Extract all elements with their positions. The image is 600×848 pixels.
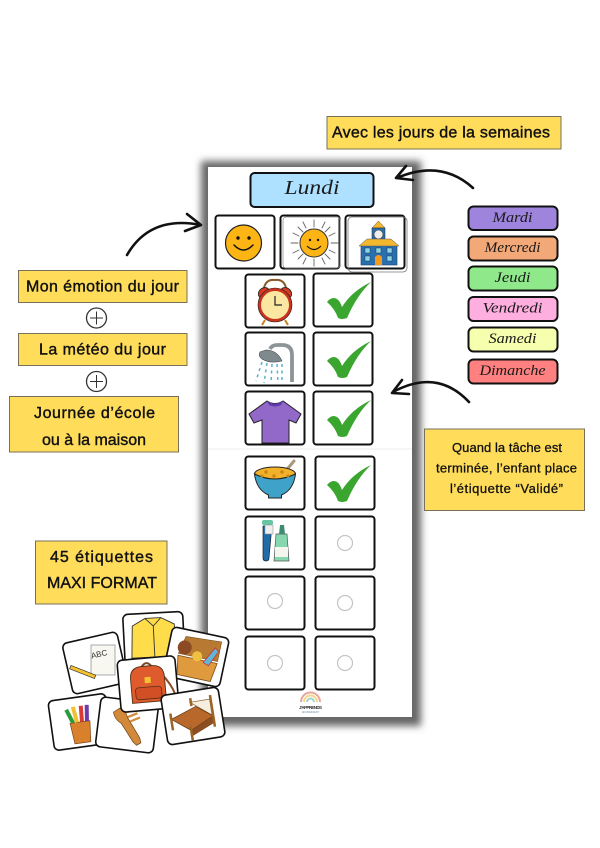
card: alarm clock [246, 274, 304, 328]
label card: writing ABC: ABC [90, 648, 108, 661]
callout: 45 maxi format labels [36, 541, 167, 604]
heading: Lundi: Lundi [283, 177, 340, 199]
day tag: Dimanche [468, 360, 558, 384]
callout: emotion of the day: Mon émotion du jour [26, 278, 180, 296]
day tag: Vendredi [468, 297, 558, 321]
callout: weather of the day: La météo du jour [39, 342, 167, 358]
validated check: wake up [314, 274, 372, 326]
empty slot [316, 576, 374, 630]
arrow: to validated checks [392, 380, 469, 402]
callout: weather of the day [18, 334, 187, 366]
empty slot [246, 636, 304, 690]
day tag: Samedi: Samedi [488, 331, 536, 347]
arrow: to day header [396, 166, 473, 188]
card: sunny weather [280, 216, 340, 268]
day tag: Mardi: Mardi [491, 210, 532, 226]
day tag: Mardi [468, 206, 558, 230]
panel: daily routine board [201, 161, 421, 726]
day tag: Dimanche: Dimanche [478, 363, 546, 379]
callout: school or home day: ou à la maison [42, 432, 146, 449]
card: cereal bowl [246, 456, 304, 510]
callout: school or home day [10, 396, 178, 452]
callout: with the days of the week [327, 116, 561, 149]
heading: Lundi [250, 173, 374, 207]
callout: with the days of the week: Avec les jours de la semaines [332, 124, 550, 142]
label card: yellow pyjama [123, 611, 185, 669]
callout: emotion of the day [18, 270, 187, 302]
card: school day [346, 216, 407, 272]
empty slot [316, 516, 374, 570]
callout: validated label explanation [424, 429, 584, 510]
card: shower [246, 332, 304, 386]
day tag: Samedi [468, 328, 558, 352]
logo: rainbow brand: EN M'AMUSANT [302, 711, 319, 714]
validated check: dressed [314, 392, 372, 444]
callout: validated label explanation: Quand la tâche est [452, 440, 562, 455]
label card: red backpack [117, 656, 179, 712]
label card: writing ABC [62, 631, 128, 695]
arrow: to emotion card [127, 214, 201, 255]
day tag: Jeudi [468, 266, 558, 290]
callout: school or home day: Journée d’école [34, 405, 155, 422]
callout: 45 maxi format labels: 45 étiquettes [50, 549, 153, 566]
label card: brown bed [160, 687, 226, 745]
day tag: Mercredi [468, 236, 558, 260]
day tag: Jeudi: Jeudi [494, 270, 530, 286]
label card: comb [95, 697, 159, 753]
callout: validated label explanation: l’étiquette “Validé” [450, 481, 563, 496]
day tag: Vendredi: Vendredi [482, 300, 542, 316]
callout: validated label explanation: terminée, l’enfant place [436, 460, 577, 476]
card: smiling emotion [216, 216, 274, 268]
icon: plus [86, 372, 106, 392]
validated check: shower [314, 332, 372, 386]
label card: pencil cup [48, 693, 112, 751]
icon: plus [86, 308, 106, 328]
empty slot [316, 636, 374, 690]
day tag: Mercredi: Mercredi [483, 240, 540, 256]
validated check: breakfast [316, 456, 374, 510]
label card: toy chest [162, 627, 230, 687]
card: toothbrush and toothpaste [246, 516, 304, 570]
logo: rainbow brand: J'APPRENDS [299, 705, 322, 710]
empty slot [246, 576, 304, 630]
card: purple t-shirt [246, 392, 304, 444]
logo: rainbow brand [299, 692, 322, 714]
pile of sample labels [48, 611, 230, 753]
callout: 45 maxi format labels: MAXI FORMAT [47, 575, 157, 592]
